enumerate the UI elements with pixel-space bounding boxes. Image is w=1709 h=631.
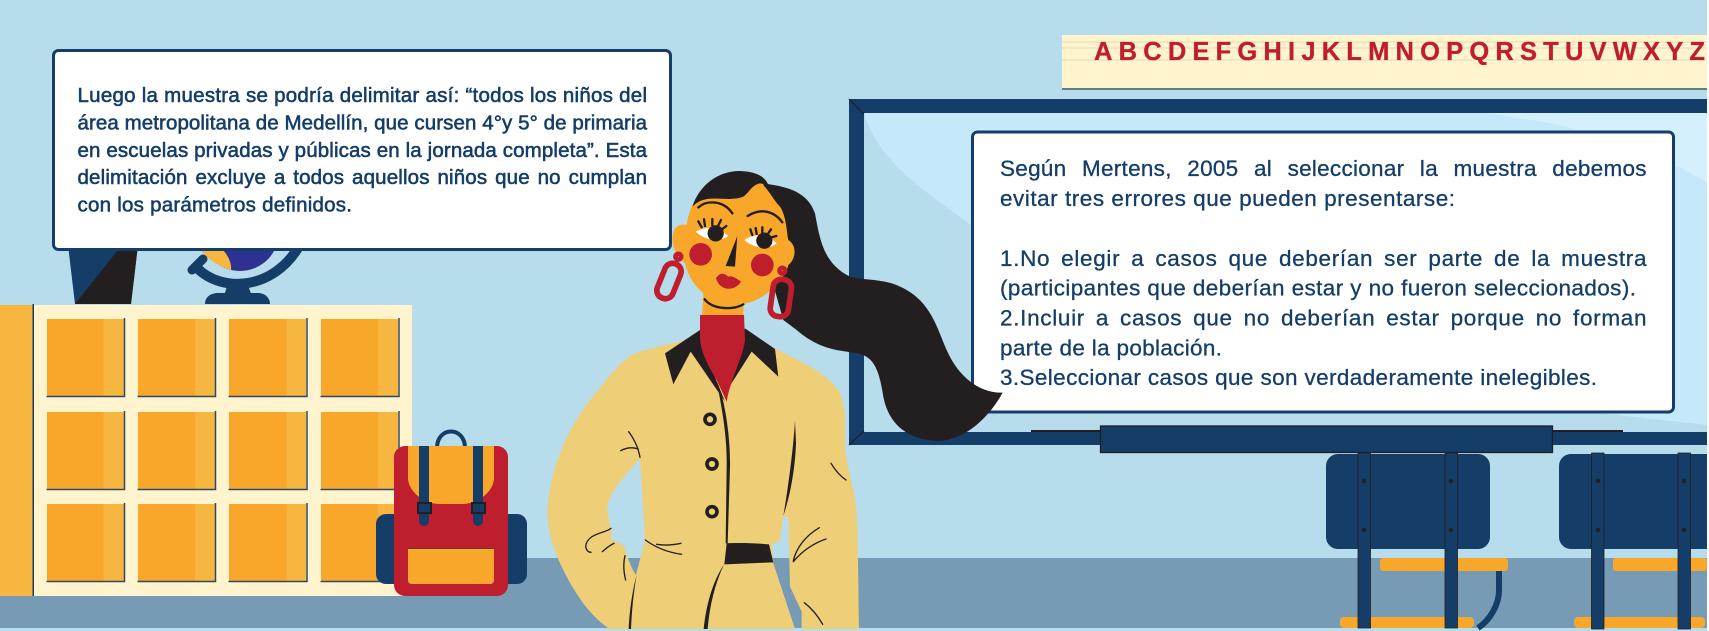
jacket wrinkles [586, 432, 846, 624]
pocket [408, 548, 494, 584]
text: errors intro [1000, 156, 1647, 390]
panel: alphabet strip [1062, 35, 1707, 90]
board light reflection [864, 113, 1707, 425]
text: errors intro: Según Mertens, 2005 al seleccionar la muestra debemos [1000, 156, 1646, 181]
panel: locker shelf [0, 304, 412, 596]
neck [702, 293, 743, 317]
text: errors intro: 2.Incluir a casos que no deberían estar porque no forman [1000, 306, 1646, 330]
seat [1613, 558, 1707, 571]
text: errors intro: 1.No elegir a casos que deberían ser parte de la muestra [1000, 246, 1647, 271]
monitor stand [68, 245, 138, 304]
foot rest [1340, 617, 1474, 628]
illustration: woman teacher [547, 171, 1003, 629]
text: sample delimitation: área metropolitana de Medellín, que cursen 4°y 5° de primaria [78, 112, 648, 134]
panel: left text box [54, 50, 670, 250]
board top-right highlight [1483, 113, 1707, 182]
text: errors intro: (participantes que deberían estar y no fueron seleccionados). [1000, 276, 1636, 300]
panel: whiteboard [849, 99, 1707, 452]
text: sample delimitation: en escuelas privadas y públicas en la jornada completa”. Esta [78, 139, 648, 162]
eyebrows [698, 202, 782, 222]
marker tray [1100, 426, 1552, 452]
buttons [705, 414, 717, 517]
text: sample delimitation: Luego la muestra se podría delimitar así: “todos los niños del [78, 84, 647, 107]
turtleneck [700, 315, 745, 402]
face [672, 183, 795, 305]
foot rest [1574, 617, 1705, 628]
text: errors intro: 3.Seleccionar casos que son verdaderamente inelegibles. [1000, 365, 1597, 390]
text: errors intro: parte de la población. [1000, 336, 1222, 360]
text: sample delimitation [78, 84, 648, 216]
lockers [47, 319, 398, 581]
eyes [696, 228, 777, 247]
chair 2 [1559, 453, 1707, 629]
text: sample delimitation: delimitación excluye a todos aquellos niños que no cumplan [78, 166, 647, 189]
straps [419, 446, 483, 526]
collar [665, 328, 778, 403]
board frame [849, 99, 1707, 445]
text: sample delimitation: con los parámetros definidos. [78, 194, 352, 216]
lips [716, 274, 741, 289]
locker highlights [104, 319, 398, 581]
icon: globe [192, 193, 298, 304]
alphabet letters: ABCDEFGHIJKLMNOPQRSTUVWXYZ [1094, 38, 1705, 66]
floor [0, 558, 1707, 628]
screws [1364, 481, 1451, 530]
legs [1592, 453, 1690, 629]
nose [726, 236, 737, 267]
pupils and lashes [698, 219, 776, 249]
panel: right text box [972, 132, 1674, 412]
legs [1358, 453, 1458, 628]
seat [1380, 558, 1508, 571]
neck shadow [705, 299, 743, 308]
earrings [654, 254, 793, 318]
jacket [547, 330, 859, 629]
rear leg [1478, 571, 1499, 628]
marker ledges [1031, 430, 1623, 432]
ponytail hair [763, 183, 1003, 441]
locker edges [46, 318, 399, 582]
cheeks [689, 243, 712, 266]
front hair [692, 171, 768, 207]
buckles [418, 503, 485, 513]
icon: backpack [376, 432, 527, 596]
right margin of image [1707, 35, 1709, 631]
chair 1 [1326, 453, 1508, 628]
text: errors intro: evitar tres errores que pueden presentarse: [1000, 186, 1455, 211]
screws [1598, 481, 1684, 530]
jacket seam and darts [629, 382, 796, 629]
